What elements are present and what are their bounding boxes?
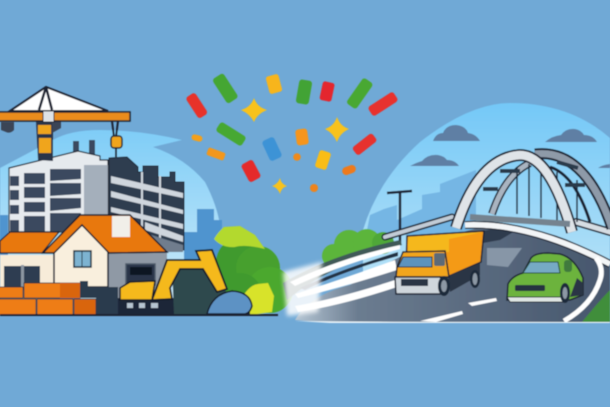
- panel: construction scene: [0, 87, 293, 317]
- guard rails: [385, 217, 610, 237]
- distant skyline: [0, 209, 222, 270]
- excavator: [0, 250, 278, 316]
- panel: bridge and road scene: [283, 103, 610, 323]
- dark base wall: [80, 281, 118, 315]
- road surface: [295, 226, 610, 322]
- sparkle stars: [241, 98, 349, 194]
- distant city: [365, 170, 476, 240]
- far bush: [322, 229, 394, 268]
- street lamp: [387, 191, 412, 245]
- bush: [214, 226, 293, 317]
- motion streaks: [283, 240, 610, 323]
- road markings: [420, 258, 601, 322]
- clouds: [410, 125, 610, 168]
- sky dome right: [363, 103, 610, 322]
- brick stack: [0, 283, 96, 315]
- building: left tower: [9, 140, 108, 232]
- sky blob left: [0, 130, 220, 315]
- tower crane: [0, 87, 130, 161]
- grass corner: [582, 290, 610, 322]
- arch bridge: [456, 154, 610, 264]
- delivery truck: [395, 231, 484, 296]
- infographic illustration: [0, 73, 610, 324]
- house: [0, 215, 167, 300]
- panel: confetti transition: [185, 73, 399, 194]
- green car: [507, 253, 583, 303]
- confetti pieces: [185, 73, 399, 192]
- building: right tower: [109, 157, 184, 252]
